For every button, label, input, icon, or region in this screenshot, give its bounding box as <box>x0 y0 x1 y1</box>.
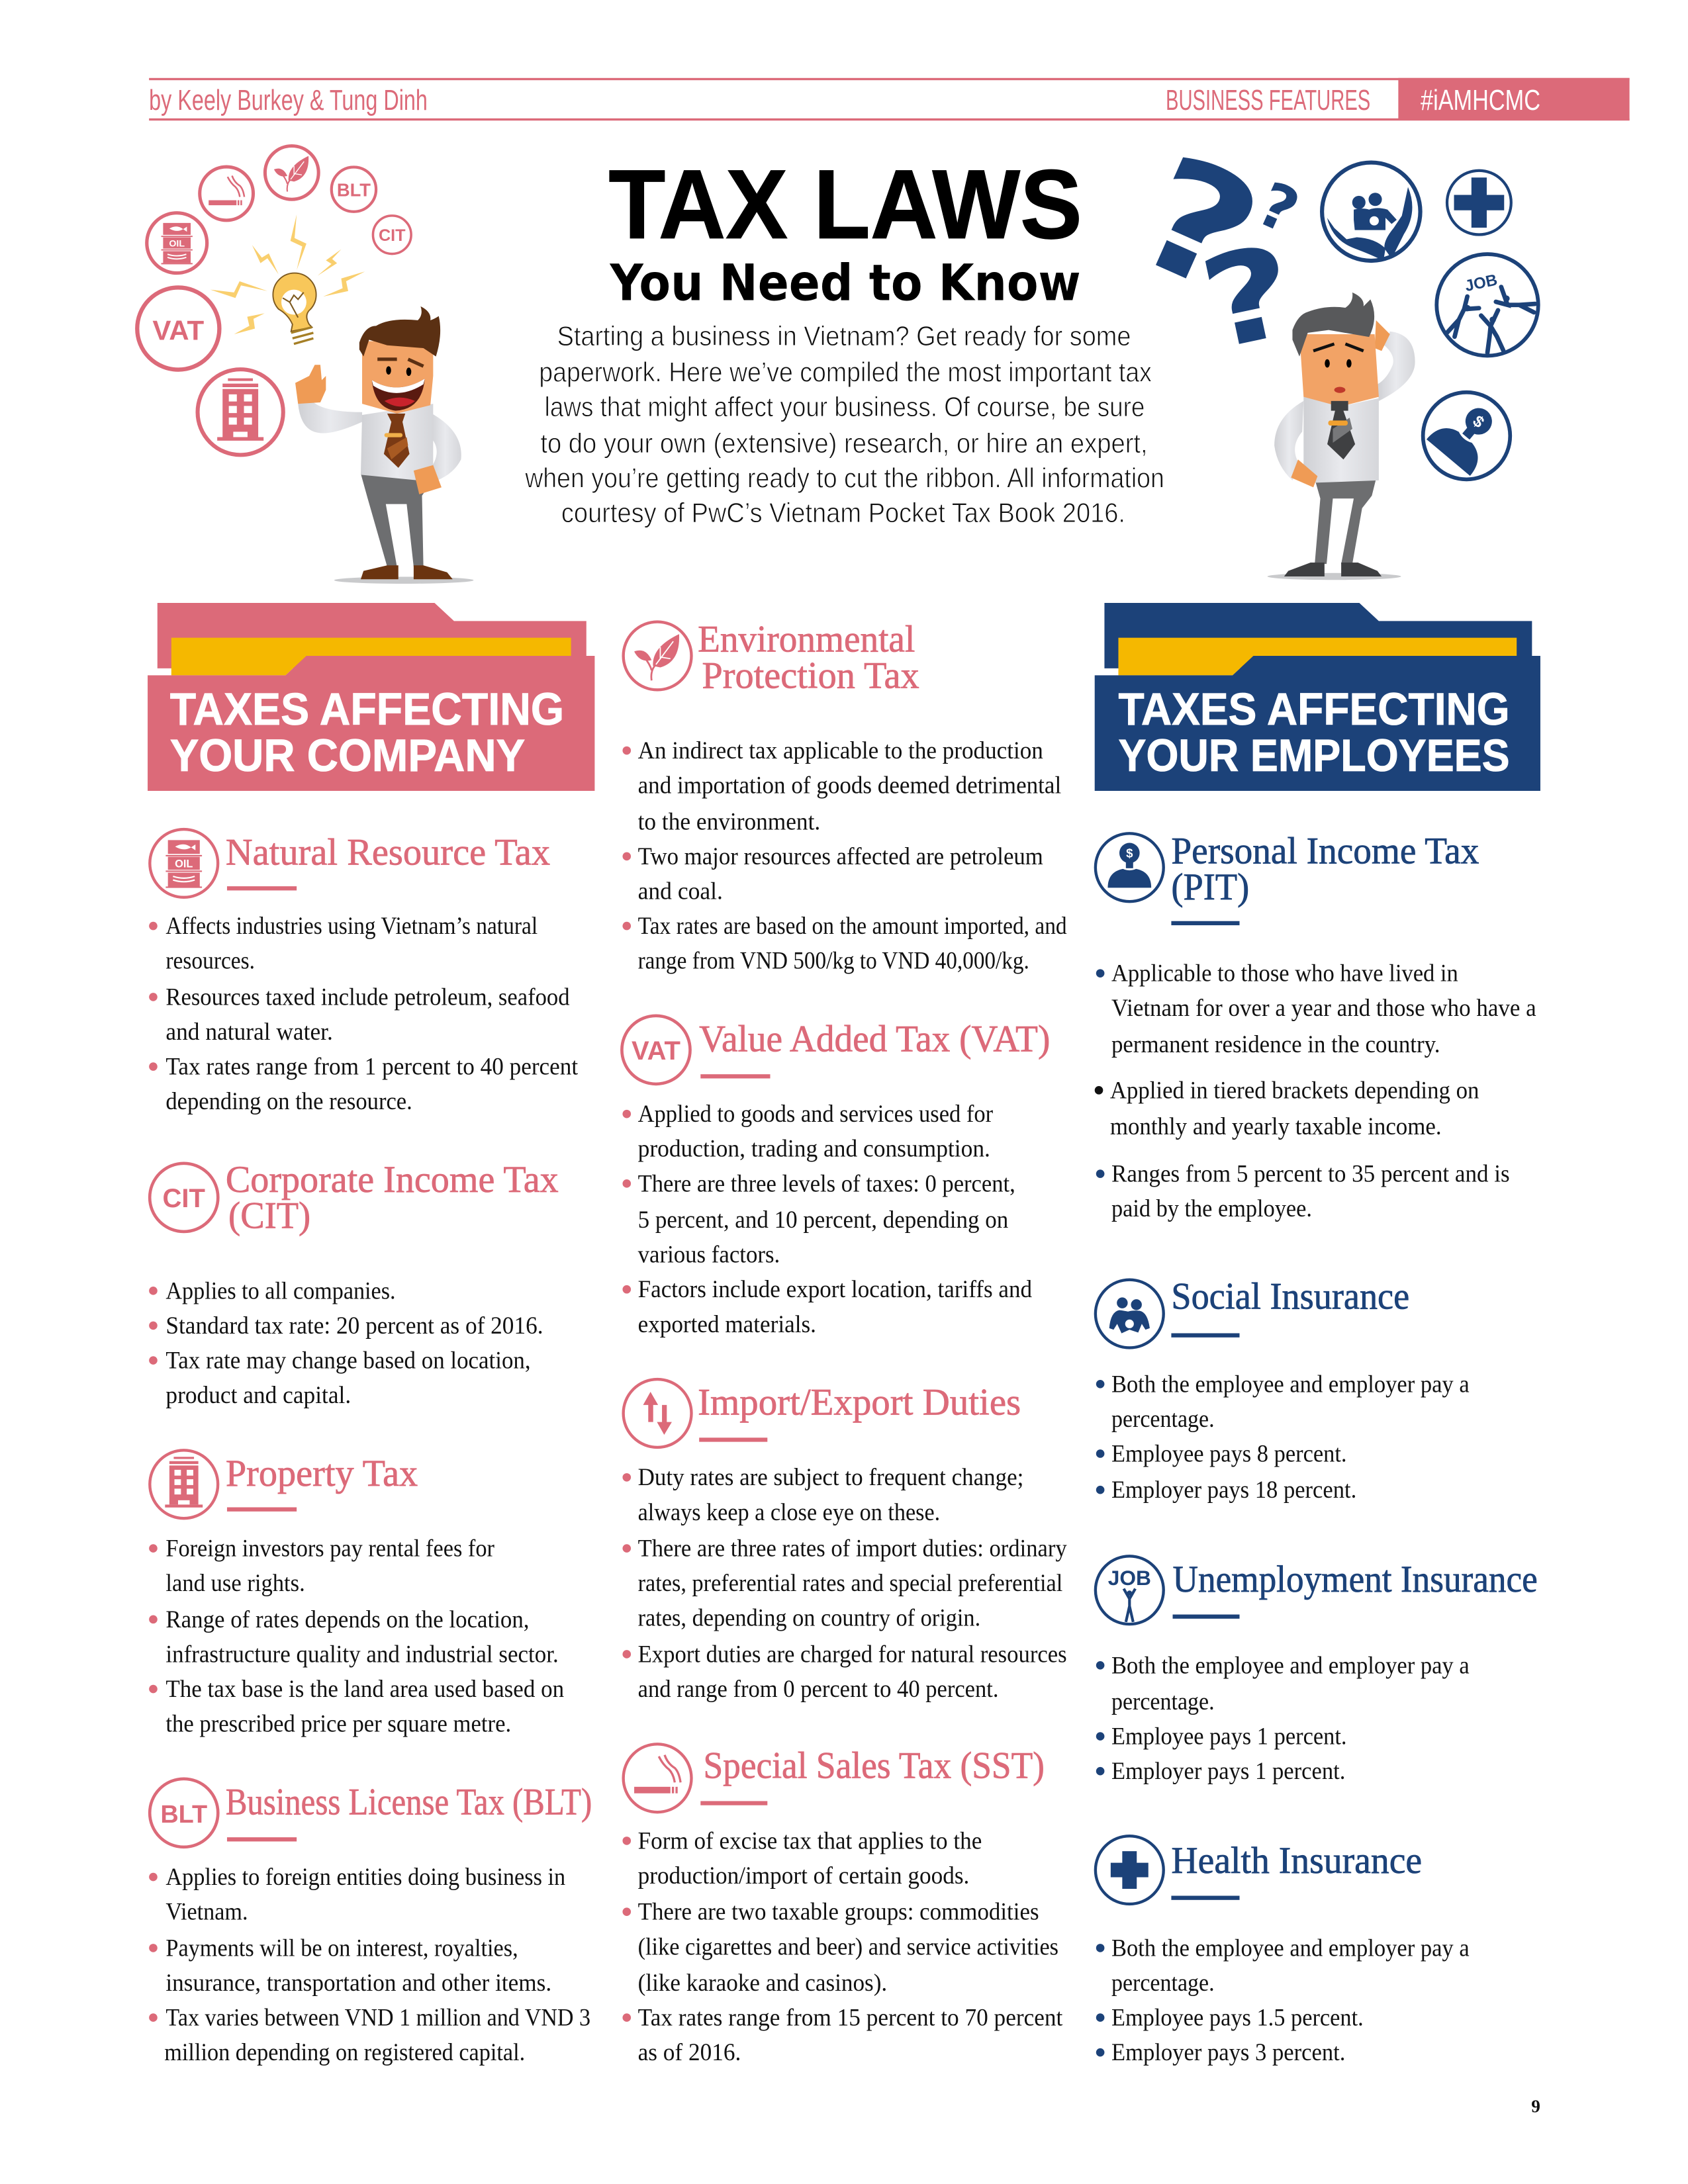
icon: CIT <box>150 1163 218 1232</box>
icon: family in hands <box>1322 163 1421 261</box>
section: property tax: Foreign investors pay rental fees for <box>165 1535 494 1562</box>
section: environmental protection tax: and coal. <box>638 878 723 905</box>
section: environmental protection tax: Two major resources affected are petroleum <box>638 842 1043 870</box>
section: import export duties: There are three rates of import duties: ordinary <box>638 1535 1067 1562</box>
section: value added tax: production, trading and consumption. <box>638 1135 990 1162</box>
section: corporate income tax: product and capital. <box>165 1381 351 1408</box>
intro paragraph: paperwork. Here we’ve compiled the most important tax <box>539 356 1152 387</box>
icon: medical cross large <box>1447 171 1511 235</box>
section: personal income tax <box>1095 830 1536 1222</box>
section: business license tax: Vietnam. <box>165 1898 248 1925</box>
section: natural resource tax: Tax rates range from 1 percent to 40 percent <box>165 1053 578 1080</box>
panel: taxes affecting your employees folder: TAXES AFFECTING <box>1118 684 1510 735</box>
section: natural resource tax: Resources taxed include petroleum, seafood <box>165 983 570 1010</box>
icon: person with dollar sign: $ <box>1469 412 1487 432</box>
section: value added tax: 5 percent, and 10 percent, depending on <box>638 1206 1008 1233</box>
section: import export duties <box>622 1379 1067 1702</box>
section: natural resource tax: Natural Resource Tax <box>226 832 550 874</box>
section: value added tax: Factors include export location, tariffs and <box>638 1275 1032 1302</box>
section: environmental protection tax <box>622 619 1067 974</box>
illustration: question marks: ? <box>1248 168 1309 248</box>
section: health insurance: Both the employee and employer pay a <box>1111 1934 1470 1961</box>
icon: cigarette <box>200 167 254 220</box>
section: environmental protection tax: An indirect tax applicable to the production <box>638 737 1043 764</box>
section: natural resource tax: resources. <box>165 947 255 974</box>
icon: CIT: CIT <box>163 1184 205 1213</box>
header bar: BUSINESS FEATURES <box>1166 85 1370 116</box>
icon: oil barrel <box>147 213 207 273</box>
icon: leaf <box>624 622 691 690</box>
icon: medical cross <box>1096 1836 1164 1904</box>
section: property tax: Property Tax <box>226 1453 418 1494</box>
panel: taxes affecting your company folder: YOUR COMPANY <box>170 731 525 781</box>
section: business license tax: Tax varies between VND 1 million and VND 3 <box>165 2004 590 2031</box>
section: business license tax: million depending on registered capital. <box>164 2038 525 2066</box>
section: property tax: The tax base is the land area used based on <box>165 1675 564 1702</box>
panel: taxes affecting your company folder <box>148 603 594 791</box>
panel: taxes affecting your employees folder <box>1095 603 1540 791</box>
section: special sales tax <box>622 1744 1062 2066</box>
section: business license tax: insurance, transportation and other items. <box>165 1969 551 1996</box>
section: special sales tax: production/import of certain goods. <box>638 1862 969 1889</box>
section: special sales tax: (like cigarettes and beer) and service activities <box>638 1933 1058 1960</box>
icon: building <box>150 1450 218 1518</box>
section: personal income tax: Ranges from 5 percent to 35 percent and is <box>1111 1160 1510 1187</box>
icon: CIT <box>373 216 411 254</box>
section: value added tax: Applied to goods and services used for <box>638 1100 993 1127</box>
section: import export duties: always keep a close eye on these. <box>638 1498 940 1525</box>
header bar <box>149 78 1630 120</box>
icon: VAT: VAT <box>152 314 205 345</box>
illustration: idea cluster of tax icons <box>137 146 411 455</box>
intro paragraph: courtesy of PwC’s Vietnam Pocket Tax Book 2016. <box>561 497 1125 528</box>
section: value added tax: Value Added Tax (VAT) <box>699 1018 1050 1060</box>
intro paragraph: to do your own (extensive) research, or hire an expert, <box>540 428 1148 459</box>
title <box>608 150 1082 312</box>
icon: person with dollar sign <box>1096 833 1164 901</box>
section: natural resource tax: and natural water. <box>165 1018 333 1045</box>
section: social insurance: Employer pays 18 percent. <box>1111 1476 1356 1503</box>
icon: BLT: BLT <box>160 1801 207 1829</box>
icon: BLT <box>150 1779 218 1847</box>
section: import export duties: rates, preferential rates and special preferential <box>638 1569 1062 1596</box>
section: value added tax: There are three levels of taxes: 0 percent, <box>638 1169 1015 1197</box>
intro paragraph: laws that might affect your business. Of course, be sure <box>545 391 1145 422</box>
section: import export duties: Import/Export Duties <box>698 1382 1021 1424</box>
section: environmental protection tax: Protection Tax <box>702 655 919 696</box>
icon: cigarette <box>624 1744 691 1812</box>
title: You Need to Know <box>610 253 1081 312</box>
icon: oil barrel: OIL <box>175 858 193 870</box>
illustration: happy businessman <box>295 306 473 584</box>
section: personal income tax: permanent residence in the country. <box>1111 1030 1440 1058</box>
section: special sales tax: Form of excise tax that applies to the <box>638 1827 982 1854</box>
icon: CIT: CIT <box>379 226 406 245</box>
icon: VAT <box>137 287 219 370</box>
icon: job: JOB <box>1108 1566 1151 1590</box>
header bar: #iAMHCMC <box>1421 85 1540 116</box>
icon: BLT: BLT <box>337 180 371 201</box>
title: TAX LAWS <box>608 150 1082 259</box>
section: corporate income tax: (CIT) <box>228 1195 310 1237</box>
section: social insurance: Employee pays 8 percent. <box>1111 1439 1347 1467</box>
section: social insurance <box>1096 1276 1470 1503</box>
illustration: worried businessman <box>1268 293 1415 580</box>
section: business license tax <box>149 1779 592 2066</box>
page number: 9 <box>1531 2097 1540 2116</box>
section: health insurance: percentage. <box>1111 1969 1215 1996</box>
intro paragraph: when you’re getting ready to cut the ribbon. All information <box>524 462 1164 493</box>
icon: light bulb with sparks <box>211 214 365 344</box>
section: special sales tax: (like karaoke and casinos). <box>638 1969 887 1996</box>
section: environmental protection tax: Environmental <box>698 619 915 660</box>
section: natural resource tax: depending on the resource. <box>165 1087 412 1115</box>
section: environmental protection tax: to the environment. <box>638 807 820 835</box>
section: special sales tax: Special Sales Tax (SST) <box>704 1745 1045 1787</box>
section: environmental protection tax: and importation of goods deemed detrimental <box>638 772 1061 799</box>
intro paragraph <box>524 320 1164 528</box>
icon: family <box>1096 1280 1164 1347</box>
section: health insurance: Employer pays 3 percent. <box>1111 2038 1345 2066</box>
section: unemployment insurance: percentage. <box>1111 1688 1215 1715</box>
section: health insurance <box>1096 1836 1470 2066</box>
section: value added tax: various factors. <box>638 1241 780 1268</box>
section: property tax: the prescribed price per square metre. <box>165 1710 511 1737</box>
section: value added tax <box>622 1016 1050 1338</box>
section: special sales tax: as of 2016. <box>638 2038 741 2066</box>
section: import export duties: rates, depending on country of origin. <box>638 1604 980 1631</box>
intro paragraph: Starting a business in Vietnam? Get ready for some <box>557 320 1131 351</box>
panel: taxes affecting your company folder: TAXES AFFECTING <box>170 684 564 735</box>
section: import export duties: and range from 0 percent to 40 percent. <box>638 1675 999 1702</box>
section: special sales tax: Tax rates range from 15 percent to 70 percent <box>638 2004 1062 2031</box>
section: unemployment insurance <box>1096 1556 1538 1784</box>
section: business license tax: Payments will be on interest, royalties, <box>165 1934 518 1961</box>
section: social insurance: Both the employee and employer pay a <box>1111 1370 1470 1397</box>
section: unemployment insurance: Both the employee and employer pay a <box>1111 1651 1470 1678</box>
header bar: by Keely Burkey & Tung Dinh <box>149 85 428 116</box>
icon: up and down arrows <box>624 1379 691 1447</box>
section: personal income tax: Personal Income Tax <box>1171 830 1479 872</box>
section: health insurance: Health Insurance <box>1171 1840 1422 1882</box>
section: property tax: land use rights. <box>165 1569 305 1596</box>
section: natural resource tax: Affects industries using Vietnam’s natural <box>165 912 538 939</box>
section: corporate income tax: Tax rate may change based on location, <box>165 1347 531 1374</box>
icon: job seekers: JOB <box>1464 271 1499 295</box>
icon: leaf <box>265 146 318 199</box>
section: personal income tax: paid by the employee. <box>1111 1195 1312 1222</box>
section: personal income tax: (PIT) <box>1171 866 1249 908</box>
section: special sales tax: There are two taxable groups: commodities <box>638 1898 1039 1925</box>
section: business license tax: Applies to foreign entities doing business in <box>165 1863 565 1890</box>
section: personal income tax: Applied in tiered brackets depending on <box>1110 1076 1479 1103</box>
section: corporate income tax: Standard tax rate: 20 percent as of 2016. <box>165 1312 543 1339</box>
illustration: question marks: ? <box>1189 217 1308 379</box>
icon: person with dollar sign: $ <box>1126 846 1133 860</box>
section: social insurance: percentage. <box>1111 1405 1215 1432</box>
section: natural resource tax <box>149 829 578 1115</box>
section: corporate income tax: Corporate Income Tax <box>226 1159 559 1201</box>
section: personal income tax: Applicable to those who have lived in <box>1111 960 1458 987</box>
section: property tax: infrastructure quality and industrial sector. <box>165 1640 559 1667</box>
section: import export duties: Export duties are charged for natural resources <box>638 1640 1067 1667</box>
section: environmental protection tax: Tax rates are based on the amount imported, and <box>638 912 1067 939</box>
section: personal income tax: Vietnam for over a year and those who have a <box>1111 994 1536 1021</box>
icon: building <box>198 369 283 455</box>
icon: VAT <box>622 1016 690 1084</box>
section: corporate income tax <box>149 1159 559 1408</box>
icon: BLT <box>332 167 376 212</box>
icon: person with dollar sign <box>1380 349 1553 522</box>
section: business license tax: Business License Tax (BLT) <box>226 1781 592 1823</box>
section: value added tax: exported materials. <box>638 1310 816 1338</box>
icon: oil barrel <box>150 829 218 897</box>
section: environmental protection tax: range from VND 500/kg to VND 40,000/kg. <box>638 947 1029 974</box>
section: personal income tax: monthly and yearly taxable income. <box>1110 1113 1442 1140</box>
icon: job seekers <box>1436 254 1538 356</box>
icon: VAT: VAT <box>632 1036 680 1066</box>
section: social insurance: Social Insurance <box>1171 1276 1409 1318</box>
section: unemployment insurance: Unemployment Insurance <box>1173 1559 1538 1600</box>
icon: oil barrel: OIL <box>169 238 185 249</box>
icon: job <box>1096 1556 1164 1624</box>
panel: taxes affecting your employees folder: YOUR EMPLOYEES <box>1118 731 1510 781</box>
section: unemployment insurance: Employee pays 1 percent. <box>1111 1723 1347 1750</box>
illustration: question marks: ? <box>1111 120 1285 330</box>
section: property tax: Range of rates depends on the location, <box>165 1606 530 1633</box>
section: property tax <box>149 1450 564 1737</box>
section: health insurance: Employee pays 1.5 percent. <box>1111 2004 1364 2031</box>
section: import export duties: Duty rates are subject to frequent change; <box>638 1463 1023 1490</box>
section: corporate income tax: Applies to all companies. <box>165 1277 396 1304</box>
section: unemployment insurance: Employer pays 1 percent. <box>1111 1757 1345 1784</box>
